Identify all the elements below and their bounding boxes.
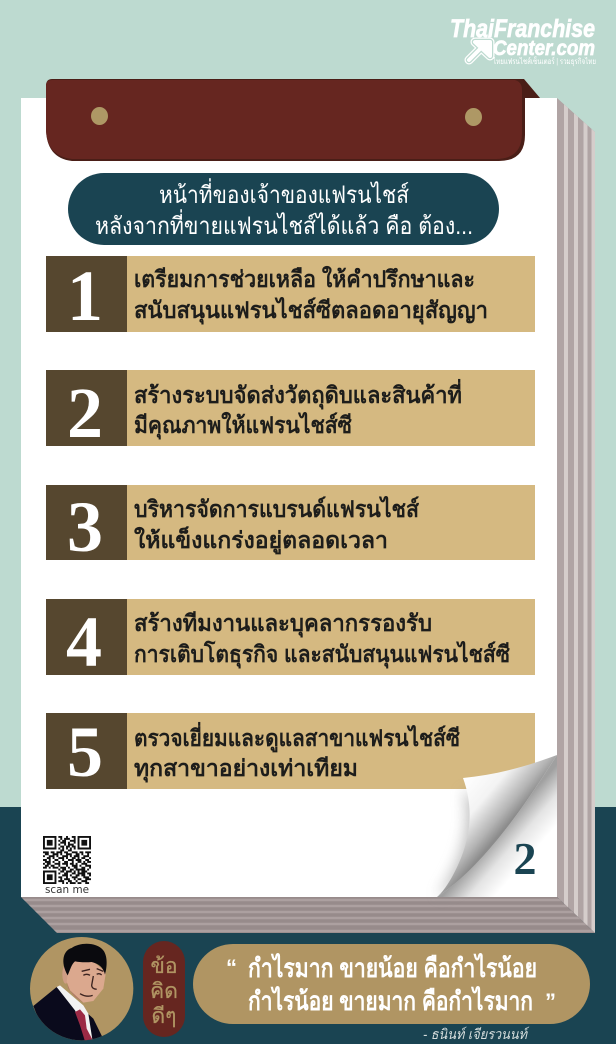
item 1 bbox=[46, 256, 535, 336]
calendar binding bar bbox=[46, 79, 540, 161]
page number: 2 bbox=[514, 833, 536, 884]
item 2: สร้างระบบจัดส่งวัตถุดิบและสินค้าที่ bbox=[134, 378, 462, 410]
shirt collar bbox=[57, 985, 92, 1039]
quote pill: ” bbox=[545, 989, 556, 1014]
item 5 bbox=[46, 712, 535, 792]
item 4 bbox=[46, 599, 535, 682]
quote pill bbox=[193, 944, 590, 1024]
quote tag: red pill bbox=[143, 941, 185, 1037]
item 4: 4 bbox=[66, 602, 102, 682]
page curl bbox=[437, 755, 557, 897]
QR code bbox=[43, 836, 91, 884]
item 2: มีคุณภาพให้แฟรนไชส์ซี bbox=[134, 411, 352, 440]
neck shadow bbox=[67, 982, 83, 1003]
item 2: 2 bbox=[67, 373, 103, 453]
necktie bbox=[75, 1009, 93, 1041]
item 4: การเติบโตธุรกิจ และสนับสนุนแฟรนไชส์ซี bbox=[134, 640, 510, 669]
quote tag: red pill: ข้อ bbox=[151, 955, 177, 978]
page stack: right edge bbox=[557, 90, 595, 940]
item 5: ตรวจเยี่ยมและดูแลสาขาแฟรนไชส์ซี bbox=[134, 721, 460, 753]
logo: ThaiFranchiseCenter.com: Center.com bbox=[493, 37, 595, 60]
item 5: 5 bbox=[67, 712, 103, 792]
quote tag: red pill: คิด bbox=[150, 980, 178, 1003]
icon: right pin bbox=[465, 108, 482, 126]
background: dark teal lower area bbox=[0, 807, 616, 1044]
hair bbox=[63, 944, 107, 975]
eyes, nose and mouth bbox=[80, 969, 103, 996]
item 3: ให้แข็งแกร่งอยู่ตลอดเวลา bbox=[134, 525, 388, 555]
ear bbox=[62, 966, 68, 984]
logo: ThaiFranchiseCenter.com bbox=[450, 15, 596, 66]
logo: ThaiFranchiseCenter.com: ThaiFranchise bbox=[450, 15, 595, 43]
item 3: บริหารจัดการแบรนด์แฟรนไชส์ bbox=[134, 495, 420, 522]
suit bbox=[33, 987, 102, 1044]
face and neck bbox=[67, 960, 106, 1003]
heading pill: หลังจากที่ขายแฟรนไชส์ได้แล้ว คือ ต้อง... bbox=[95, 209, 473, 240]
item 4: สร้างทีมงานและบุคลากรรองรับ bbox=[134, 610, 432, 638]
page stack: bottom edge bbox=[21, 897, 595, 933]
portrait illustration bbox=[30, 937, 133, 1044]
scan me label: scan me bbox=[45, 883, 89, 896]
quote tag: red pill: ดีๆ bbox=[152, 1005, 176, 1028]
item 1: สนับสนุนแฟรนไชส์ซีตลอดอายุสัญญา bbox=[134, 296, 488, 325]
quote attribution: - ธนินท์ เจียรวนนท์ bbox=[423, 1026, 530, 1042]
heading pill bbox=[68, 173, 499, 245]
background: mint upper area bbox=[0, 0, 616, 807]
item 1: 1 bbox=[67, 256, 103, 336]
quote pill: กำไรมาก ขายน้อย คือกำไรน้อย bbox=[248, 952, 537, 983]
item 5: ทุกสาขาอย่างเท่าเทียม bbox=[134, 755, 358, 783]
item 3: 3 bbox=[67, 487, 103, 567]
item 1: เตรียมการช่วยเหลือ ให้คำปรึกษาและ bbox=[134, 265, 475, 292]
icon: left pin bbox=[91, 107, 108, 125]
quote pill: “ bbox=[226, 955, 237, 980]
quote pill: กำไรน้อย ขายมาก คือกำไรมาก bbox=[248, 985, 533, 1016]
item 3 bbox=[46, 485, 535, 567]
heading pill: หน้าที่ของเจ้าของแฟรนไชส์ bbox=[159, 178, 409, 209]
item 2 bbox=[46, 370, 535, 453]
white calendar page bbox=[21, 98, 557, 897]
